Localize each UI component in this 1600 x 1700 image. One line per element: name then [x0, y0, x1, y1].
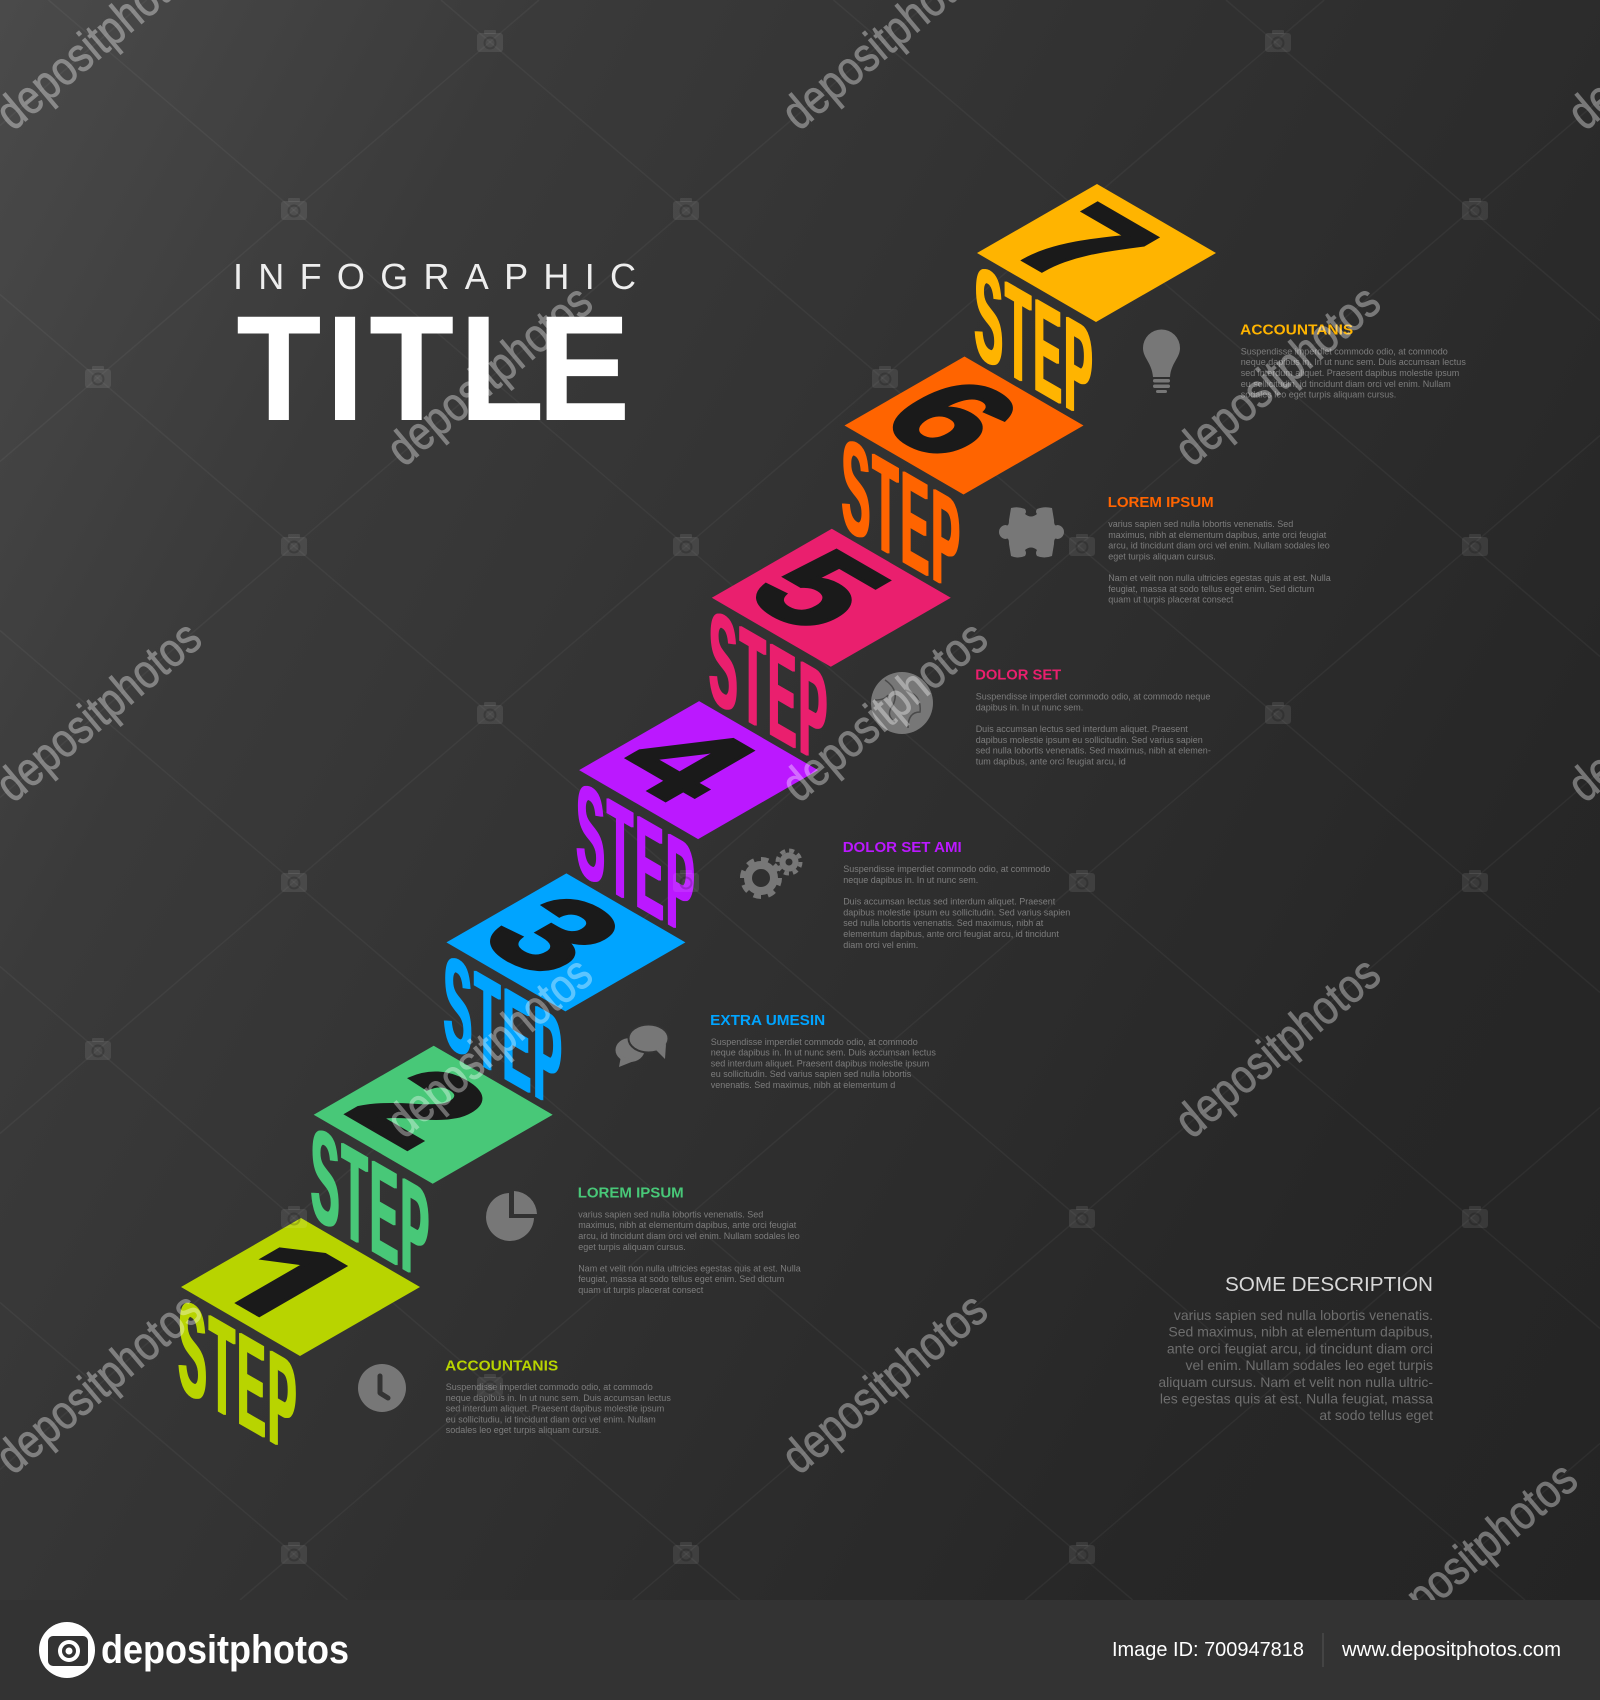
number 6: 6: [847, 357, 1057, 478]
step label 2: STEP: [311, 1098, 431, 1314]
text block: step 2: [578, 1184, 801, 1295]
tile 3: [446, 873, 685, 1011]
body: step 7: neque dapibus in. In ut nunc sem. Duis accumsan lectus: [1241, 357, 1466, 367]
step label 6: STEP: [842, 409, 962, 625]
text block: step 4: [843, 839, 1070, 950]
icon: speech bubbles: [616, 1024, 668, 1067]
body: step 6: feugiat, massa at sodo tellus eget enim. Sed dictum: [1108, 584, 1314, 594]
heading: accountanis: ACCOUNTANIS: [1240, 321, 1353, 338]
body: step 3: eu sollicitudin. Sed varius sapien sed nulla lobortis: [711, 1069, 912, 1079]
body: step 4: neque dapibus in. In ut nunc sem.: [843, 875, 978, 885]
step 6: [842, 356, 1084, 625]
text block: step 1: [445, 1358, 671, 1435]
title line: infographic: INFOGRAPHIC: [233, 256, 636, 297]
heading: lorem ipsum: LOREM IPSUM: [1108, 494, 1214, 511]
number 7: 7: [979, 185, 1189, 306]
heading: lorem ipsum: LOREM IPSUM: [578, 1184, 684, 1201]
icon: gears: [742, 850, 800, 896]
step 2: [311, 1046, 553, 1314]
footer logo icon: [39, 1622, 95, 1678]
body: step 3: Suspendisse imperdiet commodo odio, at commodo: [711, 1037, 918, 1047]
step 7: [974, 184, 1216, 453]
body: step 2: maximus, nibh at elementum dapibus, ante orci feugiat: [578, 1220, 797, 1230]
body: step 7: sodales leo eget turpis aliquam cursus.: [1241, 390, 1396, 400]
body: step 4: elementum dapibus, ante orci feugiat arcu, id tincidunt: [843, 929, 1059, 939]
body: step 4: Suspendisse imperdiet commodo odio, at commodo: [843, 864, 1050, 874]
body: step 7: eu sollicitudin, id tincidunt diam orci vel enim. Nullam: [1241, 379, 1451, 389]
body: step 5: dapibus in. In ut nunc sem.: [976, 702, 1083, 712]
step 3: [444, 873, 685, 1142]
body: step 4: Duis accumsan lectus sed interdum aliquet. Praesent: [843, 897, 1056, 907]
body: step 5: sed nulla lobortis venenatis. Sed maximus, nibh at elemen-: [976, 746, 1211, 756]
icon: pie chart: [486, 1191, 537, 1241]
tile 7: [977, 184, 1216, 322]
body: step 5: dapibus molestie ipsum eu sollicitudin. Sed varius sapien: [976, 735, 1203, 745]
description: [1158, 1273, 1433, 1423]
text block: step 3: [710, 1012, 936, 1090]
description body: at sodo tellus eget: [1319, 1407, 1433, 1423]
website: www.depositphotos.com: [1341, 1639, 1561, 1661]
body: step 3: sed interdum aliquet. Praesent dapibus molestie ipsum: [711, 1058, 929, 1068]
icon: globe: [871, 672, 933, 734]
description body: ante orci feugiat arcu, id tincidunt diam orci: [1167, 1340, 1433, 1356]
body: step 5: tum dapibus, ante orci feugiat arcu, id: [976, 756, 1126, 766]
description body: les egestas quis at est. Nulla feugiat, massa: [1160, 1390, 1433, 1406]
watermark text: depositphotos: [1165, 947, 1390, 1148]
watermark text: depositphotos: [772, 1283, 997, 1484]
heading: extra umesin: EXTRA UMESIN: [710, 1012, 825, 1029]
number 4: 4: [581, 702, 791, 823]
icon: light bulb: [1143, 330, 1180, 393]
watermark cameras: [85, 30, 1488, 1564]
body: step 4: diam orci vel enim.: [843, 940, 918, 950]
body: step 4: sed nulla lobortis venenatis. Sed maximus, nibh at: [843, 918, 1044, 928]
tile 1: [181, 1218, 420, 1356]
tile 5: [712, 529, 951, 667]
body: step 6: arcu, id tincidunt diam orci vel enim. Nullam sodales leo: [1108, 541, 1330, 551]
tile 4: [579, 701, 818, 839]
title line: title: TITLE: [236, 284, 630, 452]
body: step 6: quam ut turpis placerat consect: [1108, 595, 1234, 605]
body: step 7: Suspendisse imperdiet commodo odio, at commodo: [1241, 346, 1448, 356]
body: step 2: eget turpis aliquam cursus.: [578, 1242, 686, 1252]
watermark text: depositphotos: [1165, 275, 1390, 476]
body: step 1: Suspendisse imperdiet commodo odio, at commodo: [446, 1382, 653, 1392]
body: step 2: Nam et velit non nulla ultricies egestas quis at est. Nulla: [578, 1263, 801, 1273]
number 1: 1: [146, 1214, 406, 1364]
body: step 5: Suspendisse imperdiet commodo odio, at commodo neque: [976, 692, 1210, 702]
body: step 2: feugiat, massa at sodo tellus eget enim. Sed dictum: [578, 1274, 784, 1284]
text block: step 7: [1240, 321, 1466, 400]
body: step 1: neque dapibus in. In ut nunc sem. Duis accumsan lectus: [446, 1393, 671, 1403]
step 1: [178, 1218, 420, 1445]
body: step 4: dapibus molestie ipsum eu sollicitudin. Sed varius sapien: [843, 907, 1070, 917]
footer bar: [0, 1600, 1600, 1700]
heading: dolor set ami: DOLOR SET AMI: [843, 839, 962, 856]
body: step 2: arcu, id tincidunt diam orci vel enim. Nullam sodales leo: [578, 1231, 800, 1241]
body: step 3: venenatis. Sed maximus, nibh at elementum d: [711, 1080, 895, 1090]
description body: varius sapien sed nulla lobortis venenatis.: [1174, 1307, 1433, 1323]
footer logo wordmark: depositphotos: [101, 1628, 349, 1672]
description body: Sed maximus, nibh at elementum dapibus,: [1168, 1324, 1433, 1340]
body: step 2: quam ut turpis placerat consect: [578, 1285, 704, 1295]
body: step 2: varius sapien sed nulla lobortis venenatis. Sed: [578, 1209, 763, 1219]
body: step 3: neque dapibus in. In ut nunc sem. Duis accumsan lectus: [711, 1048, 936, 1058]
body: step 1: sed interdum aliquet. Praesent dapibus molestie ipsum: [446, 1404, 664, 1414]
body: step 7: sed interdum aliquet. Praesent dapibus molestie ipsum: [1241, 368, 1459, 378]
watermark text: depositphotos: [377, 275, 602, 476]
heading: dolor set: DOLOR SET: [975, 667, 1062, 684]
step label 3: STEP: [444, 925, 564, 1142]
step label 7: STEP: [974, 236, 1095, 453]
icon: clock: [358, 1364, 406, 1412]
body: step 5: Duis accumsan lectus sed interdum aliquet. Praesent: [976, 724, 1188, 734]
number 3: 3: [448, 874, 659, 995]
body: step 6: maximus, nibh at elementum dapibus, ante orci feugiat: [1108, 530, 1327, 540]
description body: aliquam cursus. Nam et velit non nulla ultric-: [1158, 1374, 1433, 1390]
tile 2: [314, 1046, 553, 1184]
body: step 1: sodales leo eget turpis aliquam cursus.: [446, 1425, 601, 1435]
step label 1: STEP: [178, 1270, 299, 1487]
body: step 1: eu sollicitudiu, id tincidunt diam orci vel enim. Nullam: [446, 1414, 656, 1424]
description body: vel enim. Nullam sodales leo eget turpis: [1186, 1357, 1433, 1373]
icon: puzzle piece: [999, 507, 1064, 558]
step 4: [576, 701, 818, 970]
description heading: SOME DESCRIPTION: [1225, 1273, 1433, 1296]
number 5: 5: [714, 529, 924, 651]
heading: accountanis: ACCOUNTANIS: [445, 1358, 558, 1374]
number 2: 2: [316, 1046, 526, 1168]
text block: step 6: [1108, 494, 1331, 605]
step label 5: STEP: [709, 581, 829, 797]
tile 6: [844, 356, 1084, 494]
text block: step 5: [975, 667, 1211, 766]
watermark text: depositphotos: [377, 947, 602, 1148]
step 5: [709, 529, 951, 797]
title: [233, 256, 636, 452]
step label 4: STEP: [576, 753, 697, 970]
body: step 6: Nam et velit non nulla ultricies egestas quis at est. Nulla: [1108, 573, 1331, 583]
watermark text: depositphotos: [772, 611, 997, 812]
body: step 6: eget turpis aliquam cursus.: [1108, 551, 1216, 561]
body: step 6: varius sapien sed nulla lobortis venenatis. Sed: [1108, 519, 1293, 529]
image id: Image ID: 700947818: [1112, 1639, 1304, 1661]
